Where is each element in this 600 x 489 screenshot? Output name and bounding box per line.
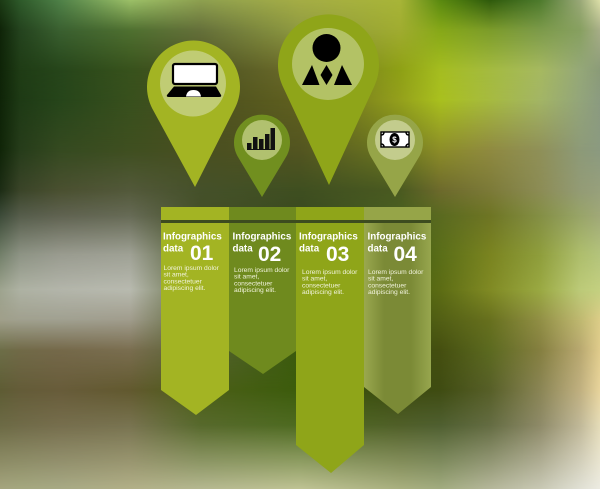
body text 02: adipiscing elit. (234, 287, 276, 294)
body text 04 (368, 269, 424, 296)
heading 01: data (163, 244, 184, 254)
banner 04 (364, 223, 431, 414)
heading 03: Infographics (299, 232, 358, 242)
body text 04: sit amet, (368, 276, 393, 283)
heading 04: Infographics (368, 232, 427, 242)
body text 04: adipiscing elit. (368, 289, 410, 296)
icon: bar chart (247, 128, 275, 150)
heading 02: 02 (258, 243, 281, 266)
banner 03 (296, 223, 364, 473)
body text 03: sit amet, (302, 276, 327, 283)
icon: banknote: $ (392, 136, 397, 144)
body text 03: adipiscing elit. (302, 289, 344, 296)
body text 01: consectetuer (164, 278, 203, 286)
map pin: laptop (147, 41, 240, 187)
heading 03: 03 (326, 243, 349, 266)
icon: laptop (167, 64, 221, 97)
banner 02 (229, 223, 296, 374)
body text 01: adipiscing elit. (164, 285, 206, 292)
shadow gap below top strip (161, 219, 431, 224)
heading 02: Infographics (232, 232, 292, 242)
heading 01 (163, 232, 222, 265)
heading 04: data (368, 244, 388, 254)
map pin: banknote (367, 115, 423, 197)
body text 02: sit amet, (234, 274, 259, 281)
map pin: bar chart (234, 115, 290, 197)
banner 01 (161, 223, 229, 415)
heading 04 (368, 232, 427, 266)
body text 02 (234, 267, 290, 294)
body text 01: Lorem ipsum dolor (164, 265, 220, 272)
body text 02: Lorem ipsum dolor (234, 267, 290, 274)
heading 03 (299, 232, 358, 266)
heading 02: data (232, 244, 253, 254)
body text 01 (164, 265, 220, 292)
body text 04: Lorem ipsum dolor (368, 269, 424, 276)
map pin: businessman (278, 14, 379, 185)
body text 04: consectetuer (368, 282, 407, 290)
body text 03 (302, 269, 358, 296)
body text 02: consectetuer (234, 280, 273, 288)
heading 01: 01 (190, 242, 214, 265)
heading 01: Infographics (163, 232, 222, 242)
top strip (161, 207, 431, 220)
heading 02 (232, 232, 292, 266)
body text 03: Lorem ipsum dolor (302, 269, 358, 276)
body text 03: consectetuer (302, 282, 341, 290)
heading 04: 04 (394, 243, 417, 266)
icon: businessman (302, 34, 352, 85)
body text 01: sit amet, (164, 272, 189, 279)
heading 03: data (299, 244, 320, 254)
